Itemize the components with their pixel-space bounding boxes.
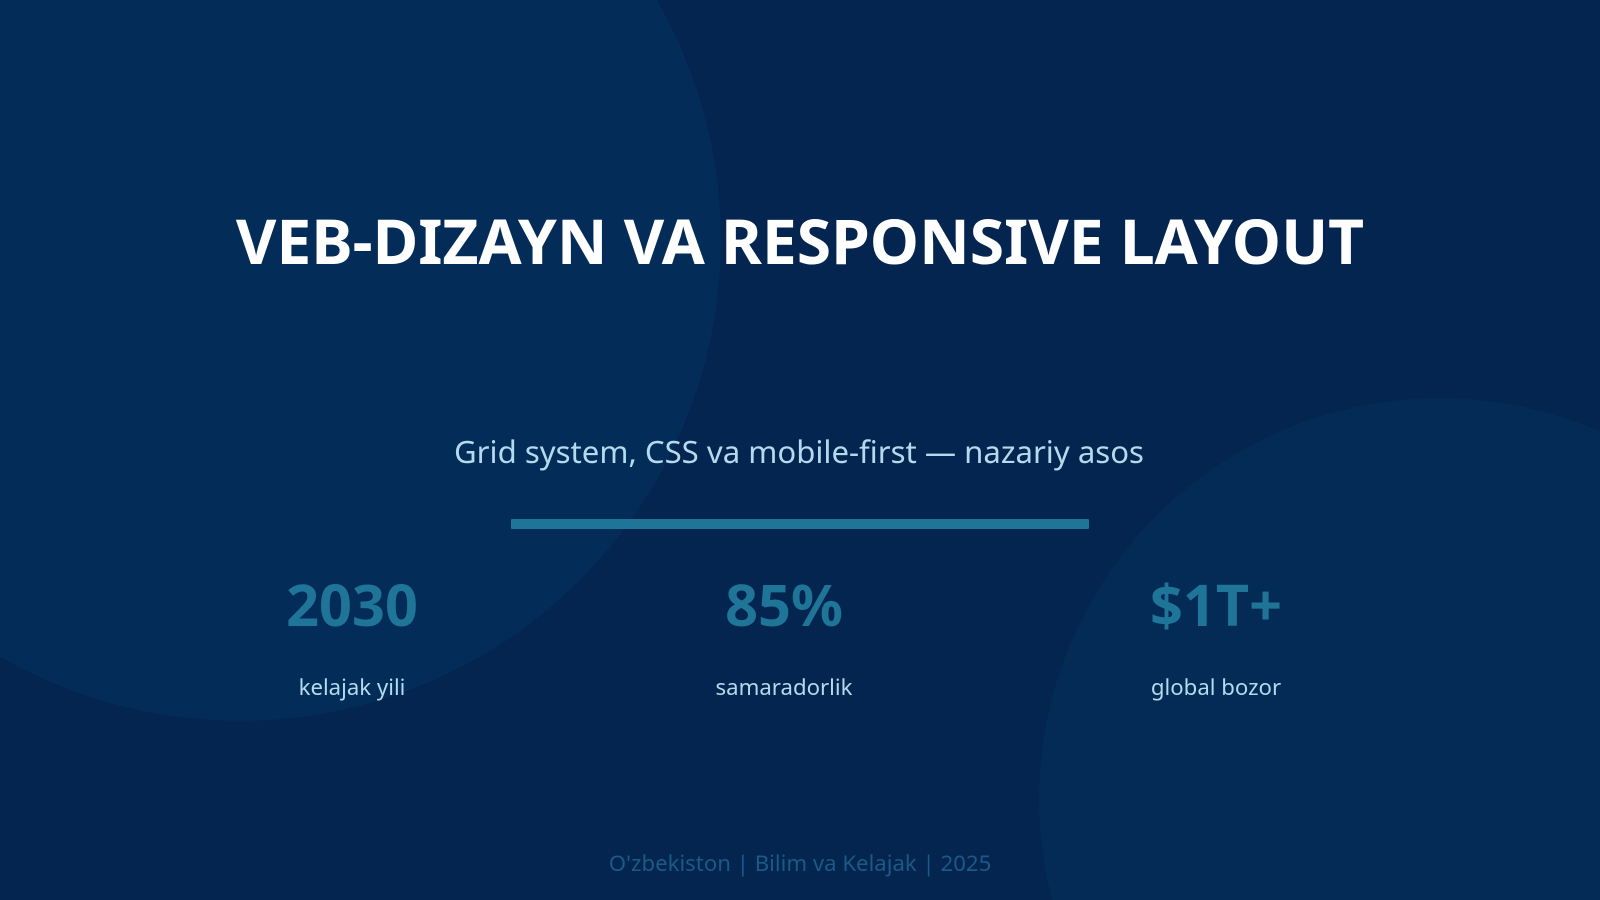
footer: O'zbekiston | Bilim va Kelajak | 2025 — [609, 847, 991, 878]
subtitle: Grid system, CSS va mobile-first — nazariy asos — [454, 431, 1144, 473]
divider bar — [511, 519, 1089, 529]
stat label: kelajak yili — [299, 671, 405, 702]
stat value: 85% — [725, 564, 843, 643]
title: VEB-DIZAYN VA RESPONSIVE LAYOUT — [236, 198, 1364, 283]
stat label: samaradorlik — [716, 671, 852, 702]
decorative circle: top left — [0, 0, 721, 721]
stat value: 2030 — [286, 564, 418, 643]
decorative circle: bottom right — [1039, 398, 1600, 900]
stat: 2030 — [286, 564, 418, 702]
stat: $1T+ — [1150, 564, 1282, 702]
stat: 85% — [716, 564, 852, 702]
stat value: $1T+ — [1150, 564, 1282, 643]
stat label: global bozor — [1151, 671, 1281, 702]
